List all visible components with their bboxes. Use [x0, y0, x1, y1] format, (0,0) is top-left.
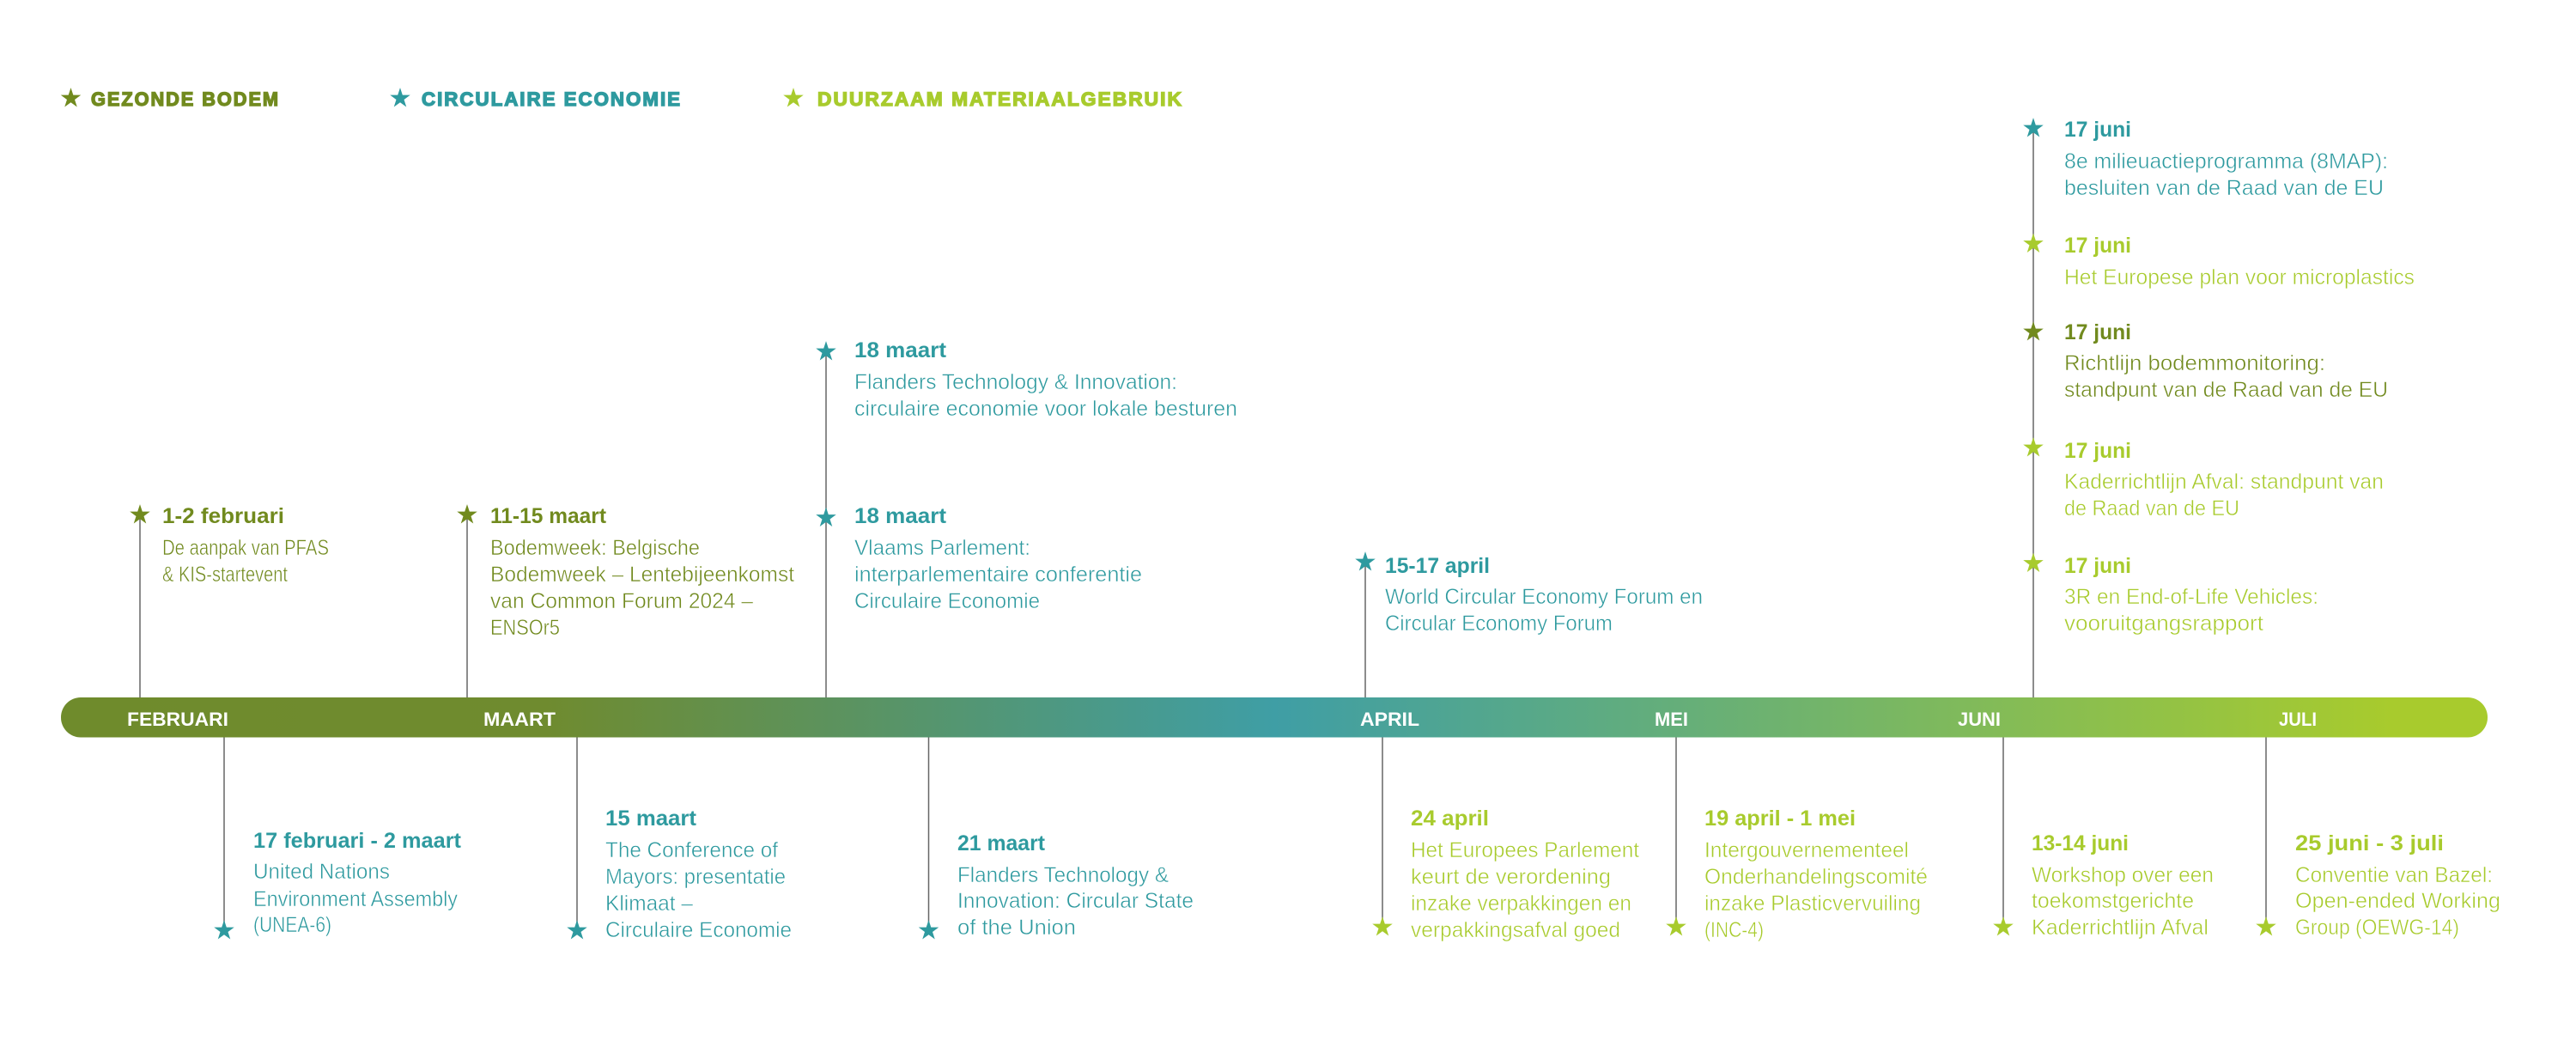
event: 1-2 februari: De aanpak van PFAS	[162, 536, 329, 560]
legend item: duurzaam materiaalgebruik: DUURZAAM MATERIAALGEBRUIK	[817, 88, 1183, 110]
event: 17 juni Kaderrichtlijn Afval: de Raad van de EU	[2064, 496, 2239, 520]
legend	[61, 88, 1183, 110]
event: 21 maart: Innovation: Circular State	[957, 889, 1194, 913]
event: 17 juni Kaderrichtlijn Afval	[2023, 437, 2384, 520]
event: 17 juni End-of-Life Vehicles	[2023, 553, 2318, 636]
event: 25 juni - 3 juli: Group (OEWG-14)	[2295, 916, 2459, 940]
event: 15 maart: Klimaat –	[605, 892, 693, 916]
event: 17 juni End-of-Life Vehicles: vooruitgangsrapport	[2064, 612, 2263, 636]
event: 24 april	[1372, 807, 1639, 942]
event: 17 februari - 2 maart: (UNEA-6)	[253, 913, 331, 937]
event: 15 maart	[567, 807, 792, 942]
event: 15-17 april: World Circular Economy Forum en	[1385, 585, 1703, 609]
event: 19 april - 1 mei: (INC-4)	[1704, 918, 1764, 942]
event: 24 april: 24 april	[1411, 807, 1489, 831]
month label: mei: MEI	[1655, 709, 1688, 730]
event: 11-15 maart: van Common Forum 2024 –	[490, 589, 753, 613]
event: 18 maart Vlaams Parlement: Circulaire Economie	[854, 589, 1040, 613]
event: 11-15 maart: 11-15 maart	[490, 504, 607, 528]
event: 15-17 april	[1355, 551, 1703, 636]
event: 15 maart: 15 maart	[605, 807, 697, 831]
event: 17 juni microplastics	[2023, 234, 2415, 289]
event: 18 maart Flanders Technology: circulaire economie voor lokale besturen	[854, 397, 1237, 421]
event: 25 juni - 3 juli: Open-ended Working	[2295, 889, 2500, 913]
event: 17 juni microplastics: 17 juni	[2064, 234, 2131, 258]
event: 24 april: inzake verpakkingen en	[1411, 892, 1631, 916]
event: 17 juni bodemmonitoring	[2023, 320, 2388, 402]
event: 18 maart Vlaams Parlement: Vlaams Parlement:	[854, 536, 1030, 560]
event: 17 juni Kaderrichtlijn Afval: Kaderrichtlijn Afval: standpunt van	[2064, 470, 2384, 494]
event: 13-14 juni: Workshop over een	[2032, 863, 2214, 887]
event: 18 maart Flanders Technology: Flanders Technology & Innovation:	[854, 370, 1177, 394]
event: 24 april: Het Europees Parlement	[1411, 838, 1639, 862]
event: 18 maart Flanders Technology: 18 maart	[854, 338, 947, 362]
event: 18 maart Vlaams Parlement	[816, 504, 1142, 613]
event: 13-14 juni	[1993, 831, 2214, 940]
event: 17 juni bodemmonitoring: 17 juni	[2064, 320, 2131, 344]
connector lines: below timeline	[224, 737, 2266, 931]
event: 15-17 april: 15-17 april	[1385, 554, 1490, 578]
event: 17 juni bodemmonitoring: standpunt van de Raad van de EU	[2064, 378, 2388, 402]
event: 19 april - 1 mei: Onderhandelingscomité	[1704, 865, 1928, 889]
event: 17 juni bodemmonitoring: Richtlijn bodemmonitoring:	[2064, 351, 2325, 375]
timeline bar	[61, 697, 2488, 737]
month label: februari: FEBRUARI	[127, 709, 228, 730]
event: 15 maart: Circulaire Economie	[605, 918, 792, 942]
event: 18 maart Flanders Technology	[816, 338, 1237, 421]
event: 25 juni - 3 juli: 25 juni - 3 juli	[2295, 831, 2444, 855]
event: 17 juni Kaderrichtlijn Afval: 17 juni	[2064, 439, 2131, 463]
event: 13-14 juni: 13-14 juni	[2032, 831, 2129, 855]
event: 25 juni - 3 juli	[2256, 831, 2500, 940]
event: 19 april - 1 mei: 19 april - 1 mei	[1704, 807, 1856, 831]
event: 17 juni microplastics: Het Europese plan voor microplastics	[2064, 265, 2415, 289]
event: 1-2 februari: & KIS-startevent	[162, 563, 288, 587]
event: 11-15 maart: Bodemweek: Belgische	[490, 536, 700, 560]
event: 17 juni 8MAP	[2023, 118, 2388, 200]
event: 25 juni - 3 juli: Conventie van Bazel:	[2295, 863, 2493, 887]
event: 21 maart: of the Union	[957, 916, 1076, 940]
event: 17 juni 8MAP: 17 juni	[2064, 118, 2131, 142]
event: 17 februari - 2 maart: Environment Assembly	[253, 887, 458, 911]
event: 21 maart: Flanders Technology &	[957, 863, 1169, 887]
event: 1-2 februari: 1-2 februari	[162, 504, 284, 528]
event: 21 maart	[919, 831, 1194, 940]
event: 11-15 maart: ENSOr5	[490, 616, 560, 640]
event: 19 april - 1 mei	[1666, 807, 1928, 942]
event: 1-2 februari	[130, 504, 329, 587]
event: 17 februari - 2 maart: 17 februari - 2 maart	[253, 829, 462, 853]
event: 17 februari - 2 maart: United Nations	[253, 860, 390, 884]
event: 13-14 juni: Kaderrichtlijn Afval	[2032, 916, 2208, 940]
connector lines: above timeline	[140, 129, 2033, 697]
month label: juli: JULI	[2279, 709, 2317, 730]
event: 24 april: verpakkingsafval goed	[1411, 918, 1620, 942]
event: 17 juni 8MAP: besluiten van de Raad van de EU	[2064, 176, 2384, 200]
event: 17 juni End-of-Life Vehicles: 17 juni	[2064, 554, 2131, 578]
event: 11-15 maart	[457, 504, 794, 640]
event: 19 april - 1 mei: inzake Plasticvervuiling	[1704, 892, 1921, 916]
month label: juni: JUNI	[1958, 709, 2001, 730]
month label: april: APRIL	[1360, 709, 1419, 730]
event: 17 juni End-of-Life Vehicles: 3R en End-of-Life Vehicles:	[2064, 585, 2318, 609]
event: 24 april: keurt de verordening	[1411, 865, 1611, 889]
legend item: gezonde bodem: GEZONDE BODEM	[91, 88, 280, 110]
event: 19 april - 1 mei: Intergouvernementeel	[1704, 838, 1909, 862]
event: 21 maart: 21 maart	[957, 831, 1046, 855]
event: 18 maart Vlaams Parlement: interparlementaire conferentie	[854, 563, 1142, 587]
event: 11-15 maart: Bodemweek – Lentebijeenkomst	[490, 563, 794, 587]
event: 17 februari - 2 maart	[214, 829, 462, 940]
event: 15 maart: Mayors: presentatie	[605, 865, 786, 889]
event: 15-17 april: Circular Economy Forum	[1385, 612, 1613, 636]
month label: maart: MAART	[483, 709, 556, 730]
legend item: circulaire economie: CIRCULAIRE ECONOMIE	[422, 88, 682, 110]
event: 18 maart Vlaams Parlement: 18 maart	[854, 504, 947, 528]
event: 15 maart: The Conference of	[605, 838, 778, 862]
event: 17 juni 8MAP: 8e milieuactieprogramma (8MAP):	[2064, 149, 2388, 173]
event: 13-14 juni: toekomstgerichte	[2032, 889, 2194, 913]
